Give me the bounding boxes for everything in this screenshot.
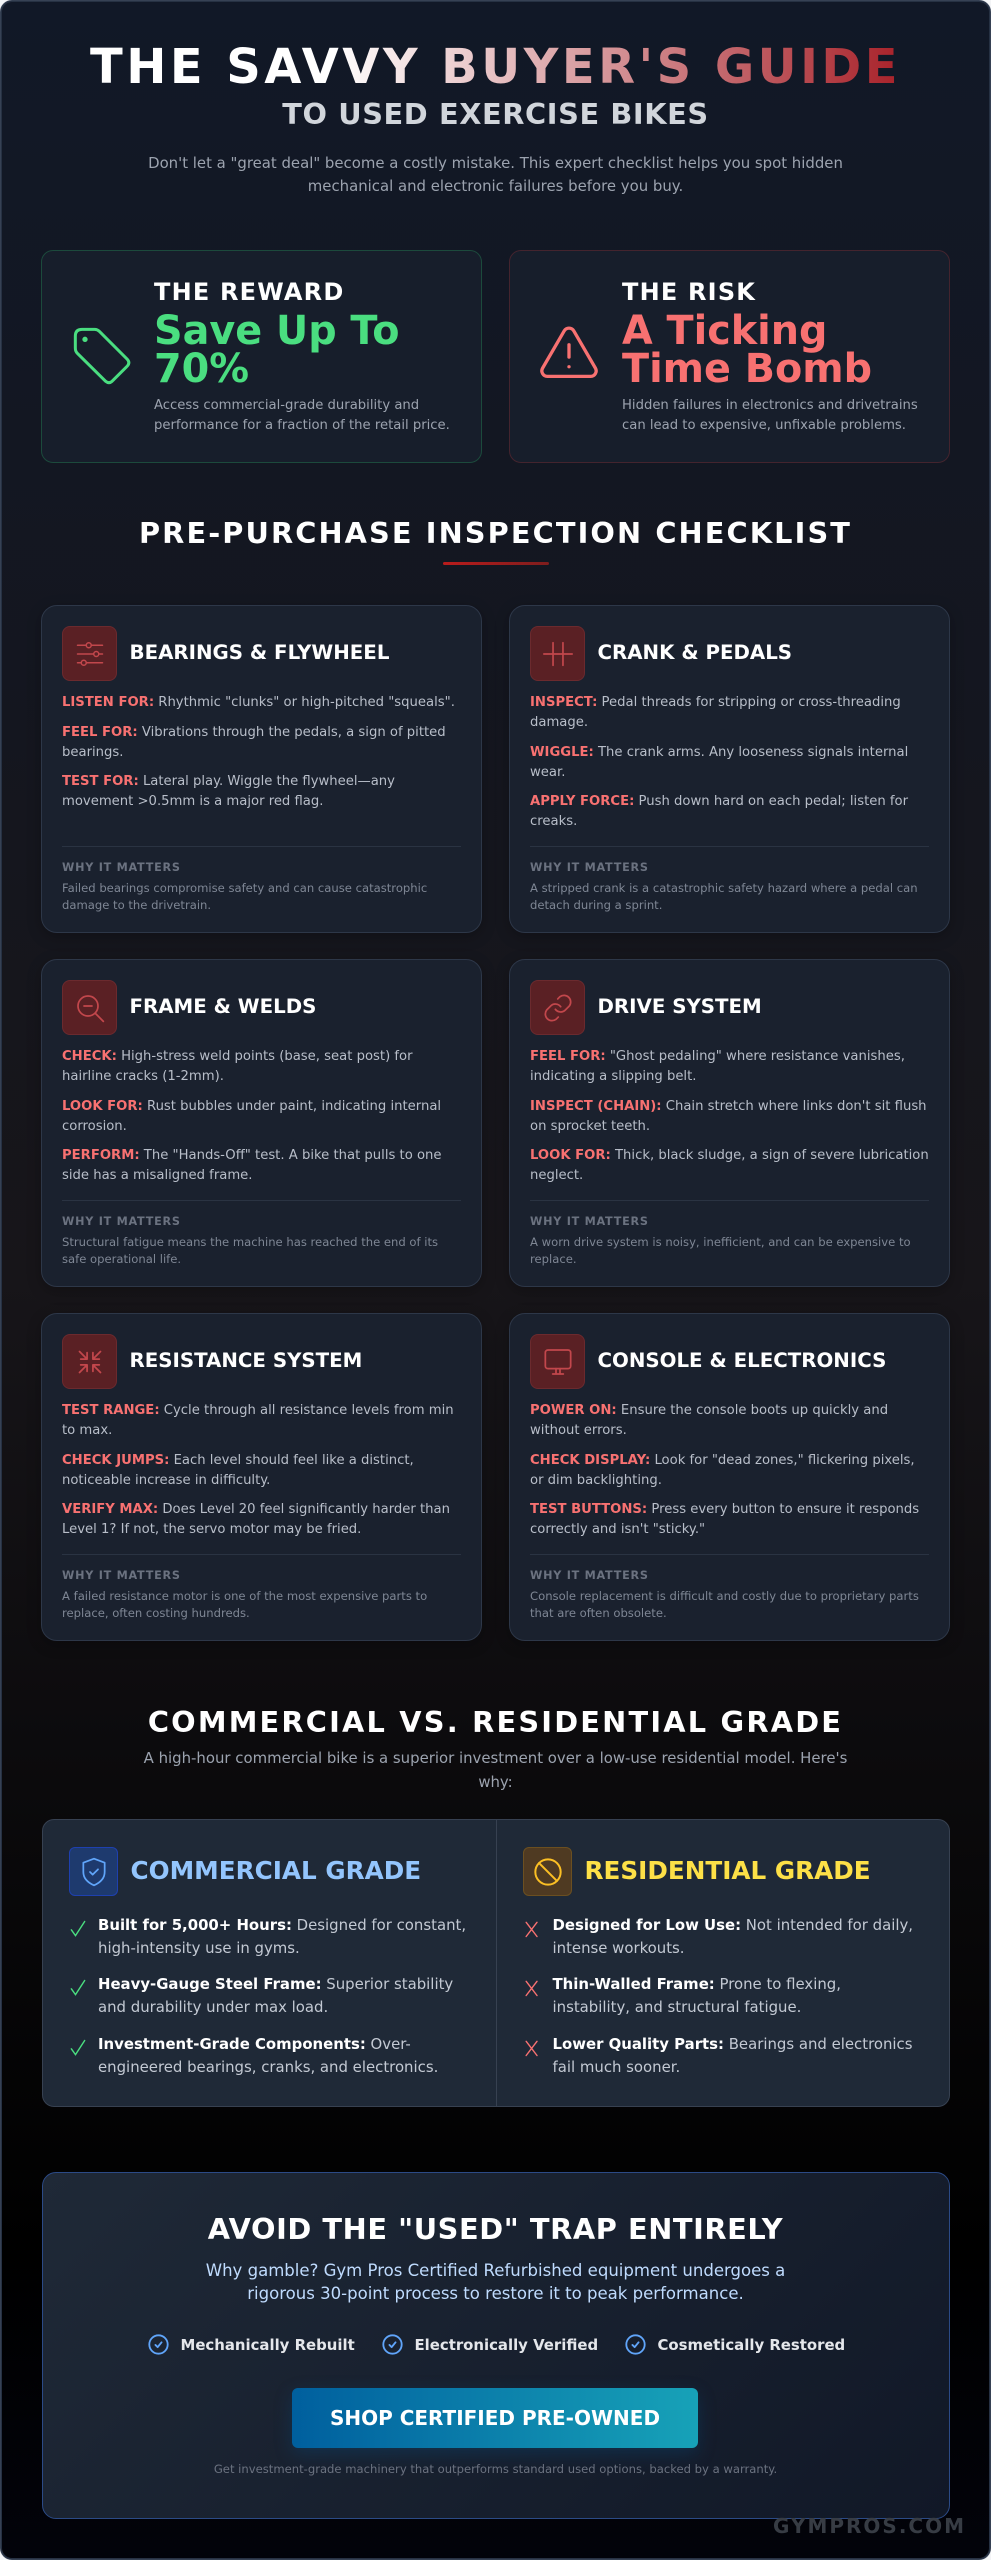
item: Investment-Grade Components: Over-engineered bearings, cranks, and electronics.	[98, 2034, 438, 2076]
checklist items: INSPECT (CHAIN): Chain stretch where links don't sit flush on sprocket teeth.	[530, 1099, 927, 1134]
panel: the risk	[509, 250, 950, 463]
cross mark	[525, 2040, 538, 2056]
comparison lists	[70, 1916, 913, 2076]
checklist items: LOOK FOR: Rust bubbles under paint, indicating internal corrosion.	[62, 1099, 441, 1134]
intro text: Don't let a "great deal" become a costly mistake. This expert checklist helps you spot hidden mechanical and electronic failures before you buy.	[148, 154, 843, 195]
icon: magnifier	[62, 980, 117, 1035]
why it matters	[62, 1554, 461, 1621]
panel: drive system	[509, 959, 950, 1287]
comparison intro: A high-hour commercial bike is a superior investment over a low-use residential model. Here's why:	[144, 1749, 847, 1791]
panel: the reward	[41, 250, 482, 463]
residential heading: RESIDENTIAL GRADE	[584, 1856, 871, 1884]
heading underline	[443, 562, 549, 565]
risk description	[622, 398, 918, 433]
why it matters: WHY IT MATTERS	[62, 1569, 181, 1582]
checklist items	[530, 1403, 919, 1537]
commercial heading: COMMERCIAL GRADE	[130, 1856, 421, 1884]
why it matters: A worn drive system is noisy, inefficient, and can be expensive to replace.	[530, 1235, 911, 1266]
icon: monitor	[530, 1334, 585, 1389]
icon: shield	[69, 1847, 118, 1896]
risk headline: A Ticking	[622, 308, 827, 354]
icon: crank	[530, 626, 585, 681]
check mark	[70, 1980, 86, 1996]
why it matters: WHY IT MATTERS	[530, 1215, 649, 1228]
panel: frame and welds	[41, 959, 482, 1287]
risk description: can lead to expensive, unfixable problems.	[622, 418, 906, 433]
checklist items	[530, 1049, 929, 1183]
reward description: performance for a fraction of the retail price.	[154, 418, 450, 433]
risk headline	[622, 308, 872, 392]
heading: comparison: COMMERCIAL VS. RESIDENTIAL GRADE	[148, 1705, 843, 1739]
checklist items: TEST RANGE: Cycle through all resistance levels from min to max.	[62, 1403, 454, 1438]
heading: checklist: PRE-PURCHASE INSPECTION CHECKLIST	[139, 516, 852, 550]
checklist items	[530, 695, 908, 829]
check mark	[70, 1920, 86, 1937]
checklist items: INSPECT: Pedal threads for stripping or cross-threading damage.	[530, 695, 901, 730]
why it matters: Console replacement is difficult and costly due to proprietary parts that are often obsolete.	[530, 1589, 919, 1620]
why it matters: Failed bearings compromise safety and can cause catastrophic damage to the drivetrain.	[62, 881, 427, 912]
icon: ban	[523, 1847, 572, 1896]
checklist items: CHECK JUMPS: Each level should feel like a distinct, noticeable increase in difficulty.	[62, 1453, 414, 1488]
panel: resistance system	[41, 1313, 482, 1641]
checklist items: PERFORM: The "Hands-Off" test. A bike that pulls to one side has a misaligned frame.	[62, 1148, 442, 1183]
icon: inward arrows	[62, 1334, 117, 1389]
reward description	[154, 398, 450, 433]
card heading: CONSOLE & ELECTRONICS	[598, 1349, 886, 1372]
benefit: cosmetically restored: Cosmetically Restored	[658, 2336, 845, 2354]
card heading: RESISTANCE SYSTEM	[130, 1349, 362, 1372]
cta button	[292, 2388, 698, 2448]
checklist items: CHECK DISPLAY: Look for "dead zones," flickering pixels, or dim backlighting.	[530, 1453, 915, 1488]
why it matters: WHY IT MATTERS	[62, 861, 181, 874]
why it matters: A stripped crank is a catastrophic safety hazard where a pedal can detach during a sprint.	[530, 881, 918, 912]
checklist items: POWER ON: Ensure the console boots up quickly and without errors.	[530, 1403, 888, 1438]
reward headline: Save Up To	[154, 308, 400, 354]
watermark: GYMPROS.COM	[773, 2514, 966, 2538]
cross mark	[525, 1980, 538, 1996]
card heading: BEARINGS & FLYWHEEL	[130, 641, 389, 664]
checklist items: VERIFY MAX: Does Level 20 feel significantly harder than Level 1? If not, the servo motor may be fried.	[62, 1502, 450, 1537]
benefit: electronically verified: Electronically Verified	[414, 2336, 598, 2354]
panel: bearings and flywheel	[41, 605, 482, 933]
panel: console and electronics	[509, 1313, 950, 1641]
checklist items: TEST FOR: Lateral play. Wiggle the flywheel—any movement >0.5mm is a major red flag.	[62, 774, 395, 809]
why it matters: A failed resistance motor is one of the most expensive parts to replace, often costing hundreds.	[62, 1589, 427, 1620]
item: Built for 5,000+ Hours: Designed for constant, high-intensity use in gyms.	[98, 1916, 466, 1957]
checklist items: TEST BUTTONS: Press every button to ensure it responds correctly and isn't "sticky."	[530, 1502, 919, 1537]
benefit: mechanically rebuilt: Mechanically Rebuilt	[180, 2336, 355, 2354]
panel: comparison	[42, 1819, 950, 2107]
why it matters	[530, 846, 929, 913]
checklist items: LISTEN FOR: Rhythmic "clunks" or high-pitched "squeals".	[62, 695, 455, 710]
footnote: Get investment-grade machinery that outperforms standard used options, backed by a warranty.	[214, 2462, 777, 2476]
subtitle: TO USED EXERCISE BIKES	[282, 97, 709, 131]
risk label: THE RISK	[622, 278, 756, 306]
why it matters	[62, 846, 461, 913]
cross mark	[525, 1922, 538, 1938]
card heading: CRANK & PEDALS	[598, 641, 792, 664]
checklist items: LOOK FOR: Thick, black sludge, a sign of severe lubrication neglect.	[530, 1148, 929, 1183]
item: Lower Quality Parts: Bearings and electronics fail much sooner.	[552, 2034, 913, 2076]
cta heading: AVOID THE "USED" TRAP ENTIRELY	[208, 2212, 783, 2246]
icon: price tag	[74, 328, 130, 384]
cta button: SHOP CERTIFIED PRE-OWNED	[330, 2406, 660, 2430]
item: Designed for Low Use: Not intended for daily, intense workouts.	[552, 1916, 913, 1957]
why it matters: WHY IT MATTERS	[530, 1569, 649, 1582]
card heading: DRIVE SYSTEM	[598, 995, 762, 1018]
checklist items: APPLY FORCE: Push down hard on each pedal; listen for creaks.	[530, 794, 908, 829]
card heading: FRAME & WELDS	[130, 995, 316, 1018]
panel: crank and pedals	[509, 605, 950, 933]
checklist items: FEEL FOR: Vibrations through the pedals, a sign of pitted bearings.	[62, 725, 446, 760]
checklist items: WIGGLE: The crank arms. Any looseness signals internal wear.	[530, 745, 908, 780]
check mark	[70, 2040, 86, 2056]
title: THE SAVVY BUYER'S GUIDE	[90, 39, 901, 95]
reward headline	[154, 308, 400, 392]
divider	[496, 1820, 497, 2106]
icon: warning triangle	[540, 326, 598, 378]
checklist items	[62, 695, 455, 809]
why it matters	[530, 1554, 929, 1621]
cta text: Why gamble? Gym Pros Certified Refurbished equipment undergoes a rigorous 30-point process to restore it to peak performance.	[206, 2261, 785, 2303]
why it matters: WHY IT MATTERS	[530, 861, 649, 874]
why it matters: WHY IT MATTERS	[62, 1215, 181, 1228]
item: Heavy-Gauge Steel Frame: Superior stability and durability under max load.	[98, 1974, 453, 2016]
checklist items: CHECK: High-stress weld points (base, seat post) for hairline cracks (1-2mm).	[62, 1049, 413, 1084]
why it matters	[62, 1200, 461, 1267]
panel: call to action	[42, 2172, 950, 2519]
reward headline: 70%	[154, 346, 249, 392]
why it matters	[530, 1200, 929, 1267]
item: Thin-Walled Frame: Prone to flexing, instability, and structural fatigue.	[552, 1974, 841, 2016]
checklist items	[62, 1049, 442, 1183]
icon: chain link	[530, 980, 585, 1035]
reward description: Access commercial-grade durability and	[154, 398, 419, 413]
icon: sliders	[62, 626, 117, 681]
why it matters: Structural fatigue means the machine has reached the end of its safe operational life.	[62, 1235, 438, 1266]
reward label: THE REWARD	[154, 278, 344, 306]
risk description: Hidden failures in electronics and drivetrains	[622, 398, 918, 413]
risk headline: Time Bomb	[622, 346, 872, 392]
checklist items	[62, 1403, 454, 1537]
checklist items: FEEL FOR: "Ghost pedaling" where resistance vanishes, indicating a slipping belt.	[530, 1049, 905, 1084]
